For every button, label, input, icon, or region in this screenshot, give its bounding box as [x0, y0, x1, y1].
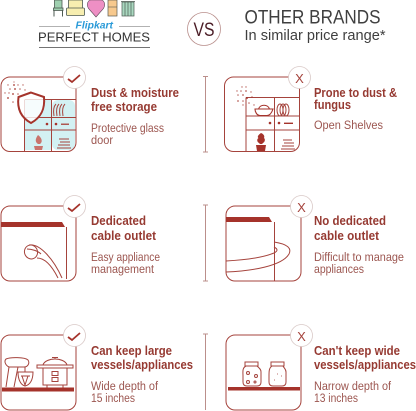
icon: rice cooker	[37, 358, 73, 388]
cable and plug	[22, 243, 62, 278]
description: Easy appliance	[91, 250, 160, 264]
title: Can keep large	[91, 343, 172, 358]
icon: curtain	[121, 2, 135, 16]
card outline	[1, 77, 76, 152]
plant	[256, 133, 266, 151]
panel: no cable outlet: appliances	[314, 262, 364, 276]
card outline	[1, 206, 76, 281]
dust dots	[4, 81, 26, 103]
description: Open Shelves	[314, 118, 383, 132]
panel: narrow shelf: 13 inches	[314, 391, 358, 405]
description: Wide depth of	[91, 379, 159, 393]
Perfect Homes wordmark: PERFECT HOMES	[38, 30, 150, 44]
shelf	[2, 388, 74, 392]
panel: glass door storage: free storage	[91, 99, 157, 114]
icon: jar full	[243, 362, 261, 386]
heading: Other Brands	[244, 8, 386, 44]
cable	[226, 242, 290, 272]
plant	[34, 135, 43, 150]
icon: sofa	[66, 0, 84, 16]
description: Narrow depth of	[314, 379, 392, 393]
card outline	[1, 335, 76, 410]
card outline	[226, 335, 301, 410]
heading: Other Brands: In similar price range*	[244, 28, 386, 44]
card outline	[224, 77, 300, 152]
card outline	[226, 206, 301, 281]
title: Dedicated	[91, 213, 146, 228]
panel: narrow shelf: X	[297, 329, 306, 344]
cabinet side	[274, 222, 276, 281]
icon: stand mixer	[5, 358, 33, 387]
panel: glass door storage	[1, 66, 179, 152]
title: No dedicated	[314, 213, 386, 228]
books	[57, 139, 71, 148]
logo: Flipkart Perfect Homes	[38, 0, 150, 48]
panel: glass door storage: door	[91, 133, 113, 147]
panel: large vessels: vessels/appliances	[91, 357, 193, 372]
dishes	[54, 104, 65, 116]
icon: cabinet	[108, 0, 117, 16]
panel: large vessels	[1, 324, 193, 410]
panel: no cable outlet: X	[297, 200, 306, 215]
check badge	[64, 66, 86, 88]
dust dots	[236, 86, 255, 106]
description: Difficult to manage	[314, 250, 404, 264]
shelf top band	[1, 222, 65, 227]
logo rules	[39, 26, 150, 28]
divider lines	[203, 76, 208, 410]
plates	[277, 104, 289, 116]
title: Dust & moisture	[91, 85, 179, 100]
panel: no cable outlet	[226, 196, 404, 281]
check badge	[64, 324, 86, 346]
shelf top band	[226, 217, 272, 222]
icon: shield	[18, 92, 44, 123]
panel: open shelves: fungus	[314, 97, 351, 112]
icon: jar empty	[269, 362, 286, 386]
panel: open shelves: X	[295, 71, 304, 86]
shelves	[24, 100, 76, 151]
heading: Other Brands: OTHER BRANDS	[244, 8, 380, 28]
shelf items	[46, 123, 69, 125]
description: Protective glass	[91, 121, 164, 135]
panel: large vessels: 15 inches	[91, 391, 135, 405]
x badge	[288, 66, 310, 88]
icon: chair	[54, 0, 63, 16]
panel: dedicated cable outlet: management	[91, 262, 155, 276]
pot	[255, 105, 273, 116]
x badge	[290, 196, 312, 218]
glass panes	[25, 100, 75, 150]
VS badge: VS	[194, 20, 214, 41]
panel: narrow shelf	[226, 324, 416, 410]
title: Prone to dust &	[314, 85, 397, 100]
x badge	[290, 324, 312, 346]
icon: heart	[87, 0, 105, 17]
panel: dedicated cable outlet	[1, 196, 160, 281]
books	[281, 140, 295, 149]
shelf	[228, 387, 300, 390]
Flipkart wordmark: Flipkart	[76, 20, 113, 32]
VS badge	[188, 12, 220, 46]
panel: open shelves	[224, 66, 397, 152]
check badge	[64, 196, 86, 218]
shelf items	[269, 122, 293, 124]
cabinet side	[66, 227, 68, 279]
shelves	[246, 98, 300, 151]
panel: no cable outlet: cable outlet	[314, 228, 380, 243]
title: Can't keep wide	[314, 343, 400, 358]
panel: dedicated cable outlet: cable outlet	[91, 228, 157, 243]
